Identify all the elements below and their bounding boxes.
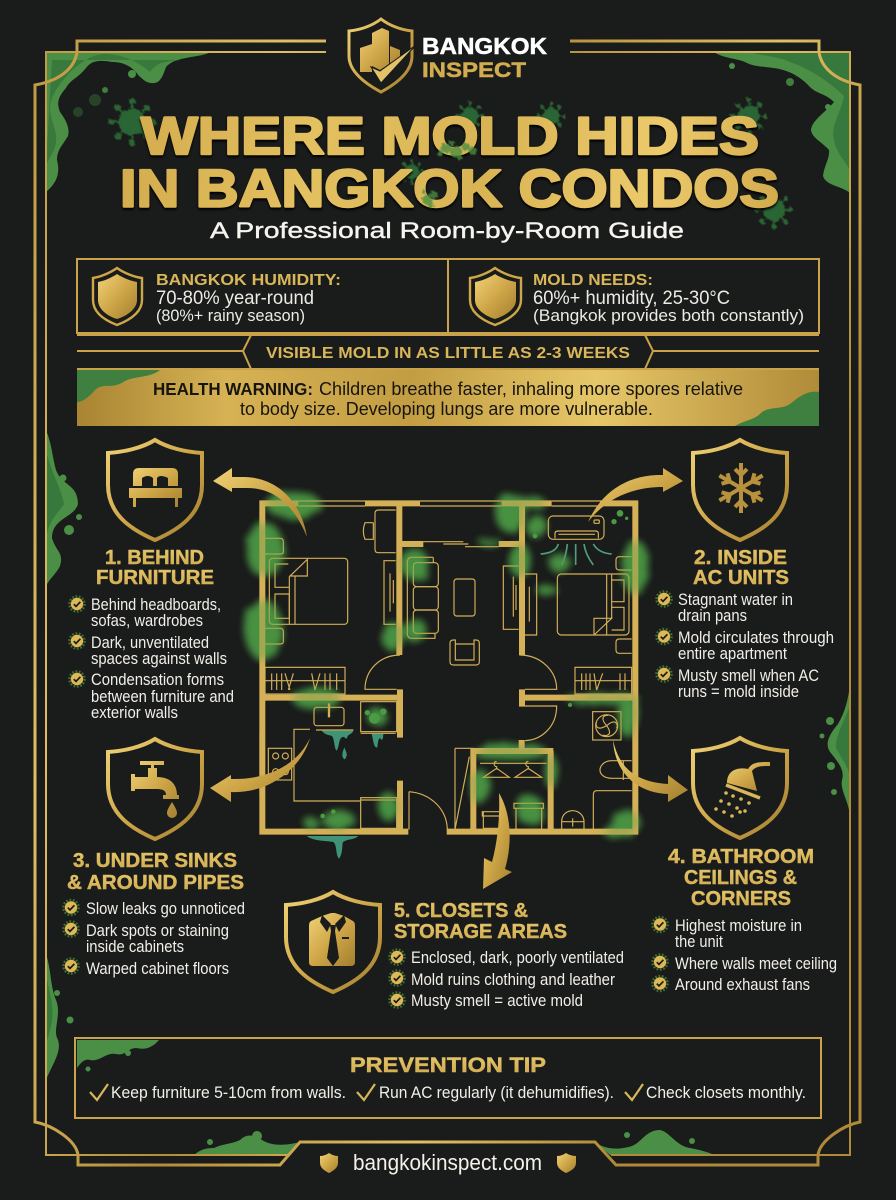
bullet list: drain pans xyxy=(678,606,747,625)
bullet list: entire apartment xyxy=(678,644,787,663)
mold needs text: 60%+ humidity, 25-30°C xyxy=(533,288,730,309)
panel: 4 bathroom ceilings and corners xyxy=(652,738,837,994)
bullet list xyxy=(652,916,837,994)
bullet list: between furniture and xyxy=(91,687,234,706)
warning text: HEALTH WARNING: xyxy=(153,379,313,399)
bullet list: Musty smell when AC xyxy=(678,666,819,685)
website: bangkokinspect.com xyxy=(353,1150,542,1175)
water drips xyxy=(307,731,383,859)
banner: visible mold timing: VISIBLE MOLD IN AS LITTLE AS 2-3 WEEKS xyxy=(266,345,630,362)
bullet list: exterior walls xyxy=(91,703,178,722)
mold: bottom left xyxy=(194,1131,300,1155)
warning text: to body size. Developing lungs are more vulnerable. xyxy=(240,399,653,419)
mold: right middle edge xyxy=(820,685,850,815)
furniture: living room xyxy=(407,557,537,665)
logo wordmark xyxy=(422,33,547,82)
bullet list: runs = mold inside xyxy=(678,682,799,701)
banner: visible mold timing xyxy=(77,335,819,369)
arrow: to behind furniture xyxy=(213,468,307,537)
warning text: Children breathe faster, inhaling more spores relative xyxy=(319,379,743,399)
heading: 1. BEHIND xyxy=(105,547,204,569)
icon: left shield xyxy=(93,268,142,325)
arrow: to bathroom xyxy=(613,740,688,802)
title xyxy=(120,107,779,218)
mold: left middle edge xyxy=(46,430,82,586)
bullet list: spaces against walls xyxy=(91,649,227,668)
title spores xyxy=(109,98,793,229)
bullet list xyxy=(69,595,234,722)
bullet list: Mold ruins clothing and leather xyxy=(411,970,615,989)
title: WHERE MOLD HIDES xyxy=(141,107,759,166)
furniture: kitchen xyxy=(268,702,397,828)
icon: snowflake shield xyxy=(693,440,787,540)
panel: 1 behind furniture xyxy=(69,440,234,722)
bullet list: sofas, wardrobes xyxy=(91,611,203,630)
furniture: right bedroom with AC xyxy=(548,516,632,694)
warning text xyxy=(153,379,743,419)
panel: health warning xyxy=(77,370,819,426)
bullet list: Where walls meet ceiling xyxy=(675,954,837,973)
furniture: left bedroom xyxy=(265,510,396,694)
icon: footer shield right xyxy=(557,1153,576,1173)
bullet list xyxy=(389,948,624,1010)
bullet list: Stagnant water in xyxy=(678,590,793,609)
bullet list: Enclosed, dark, poorly ventilated xyxy=(411,948,624,967)
mold: bottom right xyxy=(595,1130,714,1155)
walls xyxy=(262,503,635,832)
bangkok humidity text: 70-80% year-round xyxy=(156,288,314,309)
bullet list: Around exhaust fans xyxy=(675,975,810,994)
logo xyxy=(349,19,547,92)
logo wordmark: BANGKOK xyxy=(422,33,547,59)
heading: 3. UNDER SINKS xyxy=(73,850,237,872)
bullet list: the unit xyxy=(675,932,723,951)
mold patches on floor plan xyxy=(245,492,648,837)
arrow: to closets xyxy=(483,793,512,889)
heading: 4. BATHROOM xyxy=(668,846,814,868)
arrow: to under sinks xyxy=(210,738,310,802)
bullet list: Musty smell = active mold xyxy=(411,991,583,1010)
bangkok humidity text: (80%+ rainy season) xyxy=(156,306,305,325)
heading: FURNITURE xyxy=(96,567,214,589)
AC airflow arrows xyxy=(541,544,612,565)
mold needs text: (Bangkok provides both constantly) xyxy=(533,306,804,325)
footer xyxy=(320,1150,576,1175)
bullet list: Highest moisture in xyxy=(675,916,802,935)
bullet list: Slow leaks go unnoticed xyxy=(86,899,245,918)
bullet list xyxy=(656,590,834,701)
heading xyxy=(67,850,244,894)
windows and door arcs xyxy=(260,501,600,829)
closet and bathroom specks xyxy=(320,510,628,818)
floor plan xyxy=(245,492,648,859)
heading xyxy=(693,547,789,589)
heading xyxy=(96,547,214,589)
heading: AC UNITS xyxy=(693,567,789,589)
subtitle: A Professional Room-by-Room Guide xyxy=(210,218,684,243)
icon: bed shield xyxy=(108,440,202,540)
heading: STORAGE AREAS xyxy=(394,921,567,943)
heading: CORNERS xyxy=(691,888,791,910)
mold tint over walls xyxy=(245,492,648,837)
bullet list: Mold circulates through xyxy=(678,628,834,647)
bullet list: Condensation forms xyxy=(91,670,224,689)
mold needs text: MOLD NEEDS: xyxy=(533,272,653,289)
prevention tips: Keep furniture 5-10cm from walls. xyxy=(111,1083,346,1102)
bullet list: Dark, unventilated xyxy=(91,633,209,652)
prevention tips xyxy=(90,1083,806,1102)
prevention heading: PREVENTION TIP xyxy=(350,1054,546,1077)
bullet list: Dark spots or staining xyxy=(86,921,229,940)
icon: shirt and tie shield xyxy=(286,892,380,992)
heading: & AROUND PIPES xyxy=(67,872,244,894)
bullet list: Warped cabinet floors xyxy=(86,959,229,978)
heading: 5. CLOSETS & xyxy=(394,900,528,922)
heading xyxy=(394,900,567,943)
heading: CEILINGS & xyxy=(684,867,797,889)
panel: 2 inside AC units xyxy=(656,440,834,701)
heading: 2. INSIDE xyxy=(694,547,787,569)
bullet list: inside cabinets xyxy=(86,937,184,956)
panel: 3 under sinks and around pipes xyxy=(63,739,245,978)
mold: top-left corner xyxy=(46,52,211,192)
mold: top-right corner xyxy=(714,52,850,193)
icon: faucet shield xyxy=(108,739,202,839)
heading xyxy=(668,846,814,910)
arrow: to AC units xyxy=(588,468,683,522)
logo shield with buildings and check xyxy=(349,19,416,92)
title: IN BANGKOK CONDOS xyxy=(120,160,779,218)
title mold overlay xyxy=(422,140,477,208)
mold: left lower edge xyxy=(46,953,74,1080)
furniture: bathroom and closet xyxy=(480,712,632,829)
mold needs text xyxy=(533,272,804,325)
bangkok humidity text: BANGKOK HUMIDITY: xyxy=(156,272,341,289)
bullet list xyxy=(63,899,245,978)
mold on warning bar xyxy=(77,370,819,426)
icon: footer shield left xyxy=(320,1153,338,1173)
prevention tips: Run AC regularly (it dehumidifies). xyxy=(379,1083,614,1102)
panel: 5 closets and storage areas xyxy=(286,892,624,1010)
prevention tips: Check closets monthly. xyxy=(646,1083,806,1102)
bullet list: Behind headboards, xyxy=(91,595,221,614)
panel: prevention tip xyxy=(75,1038,821,1118)
logo wordmark: INSPECT xyxy=(422,58,526,82)
icon: shower shield xyxy=(693,738,787,838)
mold in panel corner xyxy=(77,1040,159,1072)
panel: humidity facts xyxy=(77,259,819,333)
icon: right shield xyxy=(470,268,521,325)
bangkok humidity text xyxy=(156,272,341,325)
